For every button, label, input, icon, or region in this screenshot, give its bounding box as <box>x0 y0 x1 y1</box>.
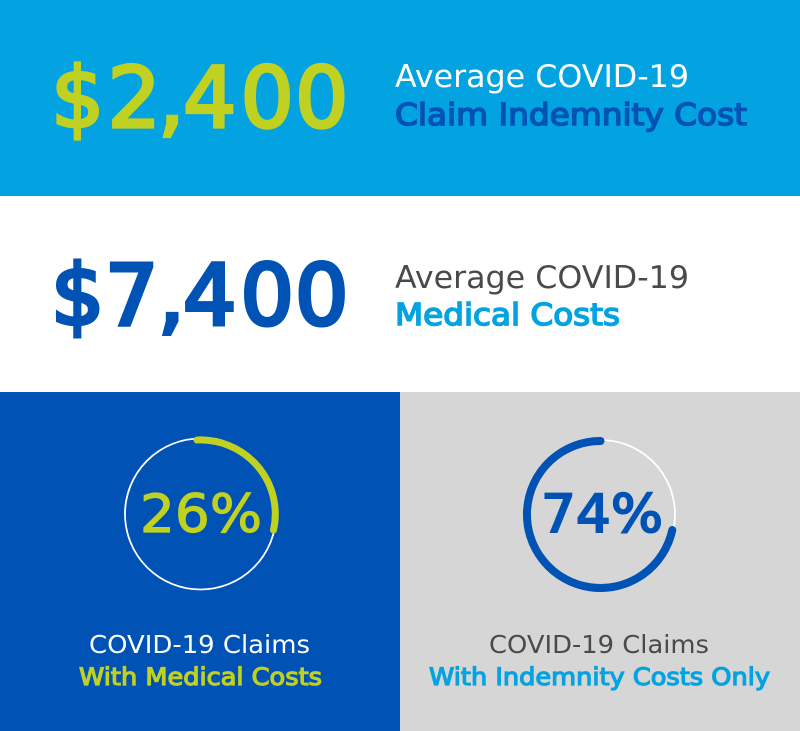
text: medical costs label: Medical Costs <box>395 298 620 333</box>
text: indemnity only claims caption: COVID-19 Claims <box>489 630 709 659</box>
chart: 26 percent ring <box>125 438 276 590</box>
panel: claims with indemnity costs only <box>400 392 800 731</box>
big number: $2,400: $2,400 <box>51 49 348 147</box>
text: medical costs label: Average COVID-19 <box>395 260 689 296</box>
text: medical costs claims caption: With Medical Costs <box>79 663 322 691</box>
chart: 26 percent ring: 26% <box>140 484 262 545</box>
text: indemnity only claims caption <box>429 630 770 691</box>
panel: indemnity cost banner <box>0 0 800 196</box>
chart: 74 percent ring: 74% <box>541 484 663 545</box>
text: indemnity cost label <box>395 59 747 133</box>
text: indemnity cost label: Claim Indemnity Cost <box>395 98 747 133</box>
big number: $7,400: $7,400 <box>51 246 348 344</box>
text: medical costs claims caption: COVID-19 Claims <box>89 630 310 659</box>
panel: claims with medical costs <box>0 392 400 731</box>
panel: medical costs banner <box>0 196 800 392</box>
text: medical costs label <box>395 260 689 333</box>
text: medical costs claims caption <box>79 630 322 691</box>
text: indemnity only claims caption: With Indemnity Costs Only <box>429 663 770 691</box>
text: indemnity cost label: Average COVID-19 <box>395 59 689 95</box>
chart: 74 percent ring <box>526 440 675 589</box>
